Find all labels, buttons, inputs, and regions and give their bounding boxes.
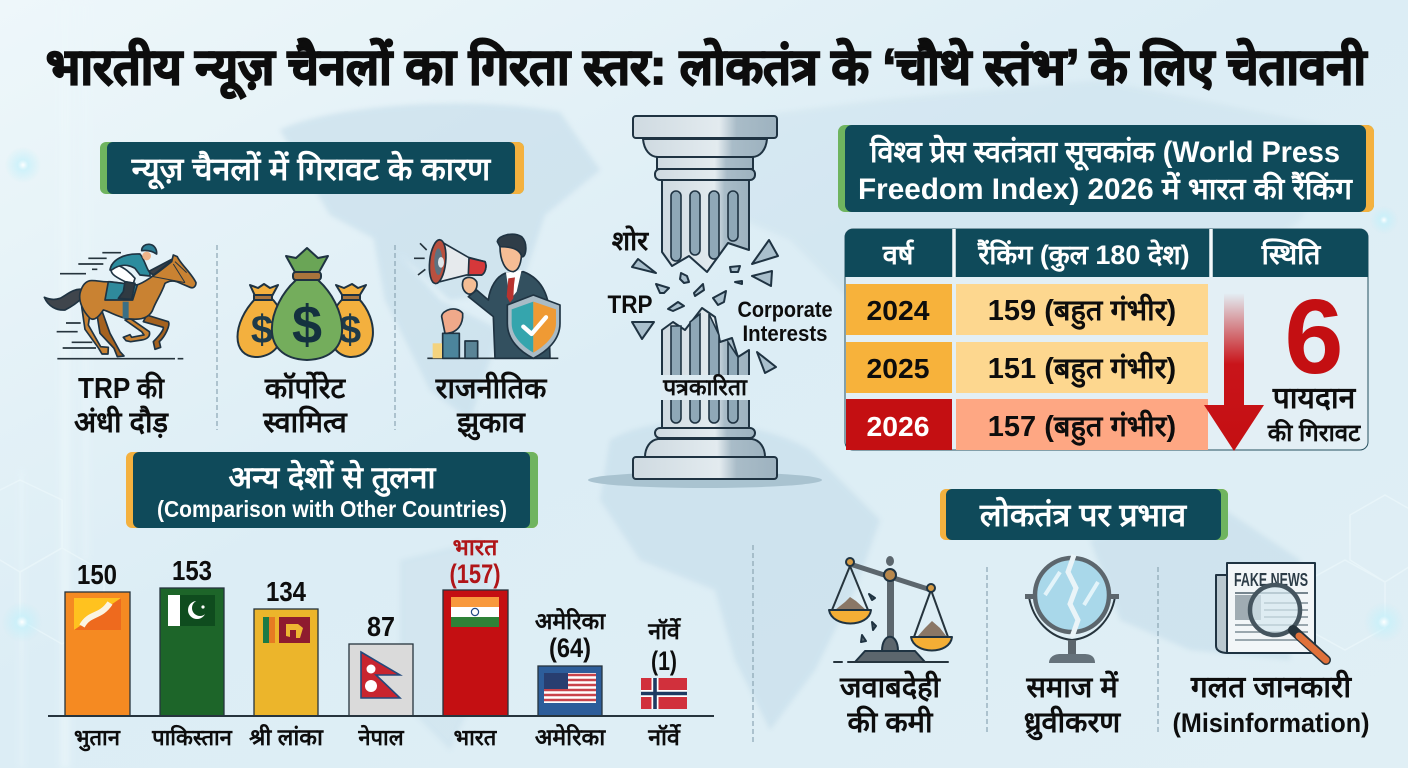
label: corporate ownership: [262, 371, 349, 439]
bar: India: (157): [450, 559, 500, 589]
label: noise: शोर: [612, 225, 649, 256]
row 2025: 2025: [866, 353, 930, 384]
bar: Nepal: 87: [367, 611, 395, 642]
panel: impact on democracy: [753, 489, 1370, 745]
label: polarisation: समाज में: [1025, 670, 1119, 704]
heading: ranking: Freedom Index) 2026 में भारत की रैंकिंग: [858, 171, 1353, 206]
icon: money bags: $: [251, 308, 273, 352]
label: political bias: राजनीतिक: [435, 371, 548, 405]
label: lack of accountability: जवाबदेही: [839, 670, 941, 704]
label: corporate ownership: स्वामित्व: [262, 405, 349, 439]
bar: Nepal: नेपाल: [357, 724, 405, 750]
bar: USA: (64): [549, 633, 591, 663]
label: TRP: TRP: [608, 291, 652, 319]
bar: Norway: नॉर्वे: [647, 617, 682, 644]
bar: Pakistan: पाकिस्तान: [151, 724, 233, 750]
bar: India: [443, 534, 508, 750]
illustration: broken pillar: [588, 116, 832, 488]
heading: ranking: विश्व प्रेस स्वतंत्रता सूचकांक (World Press: [869, 134, 1340, 171]
falling shards: [632, 240, 778, 373]
bar: Norway: [641, 617, 687, 750]
heading: impact: [940, 489, 1228, 540]
panel: press freedom ranking: [838, 125, 1374, 451]
row 2025: [846, 342, 1208, 393]
row 2025: 151 (बहुत गंभीर): [988, 351, 1176, 388]
heading: causes: [100, 142, 524, 194]
panel: comparison with other countries: [48, 452, 714, 752]
heading: comparison: [126, 452, 538, 528]
label: TRP race: [74, 371, 169, 439]
bar: Nepal: [349, 611, 413, 750]
label: TRP race: अंधी दौड़: [74, 405, 169, 439]
icon: money bags: [238, 248, 373, 360]
callout: six places fall: पायदान: [1272, 382, 1357, 415]
bar: India: भारत: [453, 534, 498, 560]
bar: USA: अमेरिका: [535, 607, 606, 634]
icon: money bags: $: [292, 295, 322, 355]
callout: six places fall: [1267, 278, 1361, 447]
bar: Sri Lanka: श्री लांका: [249, 723, 324, 750]
table header: रैंकिंग (कुल 180 देश): [976, 239, 1190, 272]
heading: comparison: अन्य देशों से तुलना: [228, 459, 437, 497]
label: TRP race: TRP की: [78, 371, 165, 405]
label: misinformation: (Misinformation): [1172, 708, 1370, 738]
label: polarisation: [1024, 670, 1121, 741]
title: भारतीय न्यूज़ चैनलों का गिरता स्तर: लोकतंत्र के ‘चौथे स्तंभ’ के लिए चेतावनी: [46, 38, 1368, 99]
icon: fake news newspaper: FAKE NEWS: [1234, 570, 1308, 590]
pillar upper shaft: [662, 180, 749, 272]
arrow: downward fall: [1204, 293, 1264, 451]
bar: Pakistan: [151, 555, 233, 750]
table header: [882, 238, 1321, 272]
icon: money bags: $: [339, 308, 361, 352]
row 2024: 159 (बहुत गंभीर): [988, 293, 1176, 330]
bar: Bhutan: भुतान: [74, 725, 121, 752]
label: political bias: झुकाव: [456, 407, 527, 441]
label: corporate interests: Interests: [742, 321, 828, 346]
label: corporate interests: Corporate: [738, 297, 832, 322]
icon: politician with megaphone: [414, 234, 560, 358]
label: political bias: [435, 371, 548, 441]
row 2026: 157 (बहुत गंभीर): [988, 409, 1176, 446]
bar: Pakistan: 153: [172, 555, 212, 586]
icon: fake news newspaper: [1216, 563, 1326, 660]
row 2026: 2026: [866, 411, 930, 442]
pillar lower shaft: [661, 308, 750, 428]
label: journalism: पत्रकारिता: [662, 373, 748, 400]
label: lack of accountability: की कमी: [847, 705, 934, 739]
bar: India: भारत: [454, 725, 498, 750]
bar: Sri Lanka: [249, 576, 324, 750]
table header: वर्ष: [882, 239, 915, 270]
icon: cracked mirror: [1025, 555, 1119, 663]
heading: comparison: (Comparison with Other Countries): [157, 496, 507, 522]
heading: impact: लोकतंत्र पर प्रभाव: [979, 496, 1187, 533]
bar: USA: [535, 607, 606, 750]
heading: causes: न्यूज़ चैनलों में गिरावट के कारण: [131, 150, 492, 190]
row 2024: [846, 284, 1208, 335]
row 2024: 2024: [866, 295, 930, 326]
label: polarisation: ध्रुवीकरण: [1024, 705, 1121, 741]
callout: six places fall: 6: [1285, 278, 1343, 396]
label: lack of accountability: [839, 670, 941, 739]
bar chart: press freedom rank: [48, 534, 714, 752]
label: misinformation: गलत जानकारी: [1190, 669, 1352, 704]
callout: six places fall: की गिरावट: [1267, 419, 1361, 447]
label: misinformation: [1172, 669, 1370, 738]
label: corporate interests: [738, 297, 832, 346]
table: yearly ranking: [845, 229, 1368, 451]
row 2026: [846, 399, 1208, 450]
icon: racing horse: [44, 244, 196, 359]
icon: unbalanced scales: [829, 556, 952, 662]
panel: causes of decline: [44, 142, 560, 441]
bar: Norway: (1): [651, 646, 677, 676]
heading: ranking: [838, 125, 1374, 212]
bar: Bhutan: [65, 559, 130, 752]
bar: USA: अमेरिका: [535, 723, 606, 750]
bar: Sri Lanka: 134: [266, 576, 306, 607]
pillar capital: [633, 116, 777, 180]
label: corporate ownership: कॉर्पोरेट: [264, 371, 347, 405]
bar: Bhutan: 150: [77, 559, 117, 590]
pillar base: [633, 428, 777, 479]
bar: Norway: नॉर्वे: [647, 723, 682, 750]
table header: स्थिति: [1261, 238, 1321, 270]
